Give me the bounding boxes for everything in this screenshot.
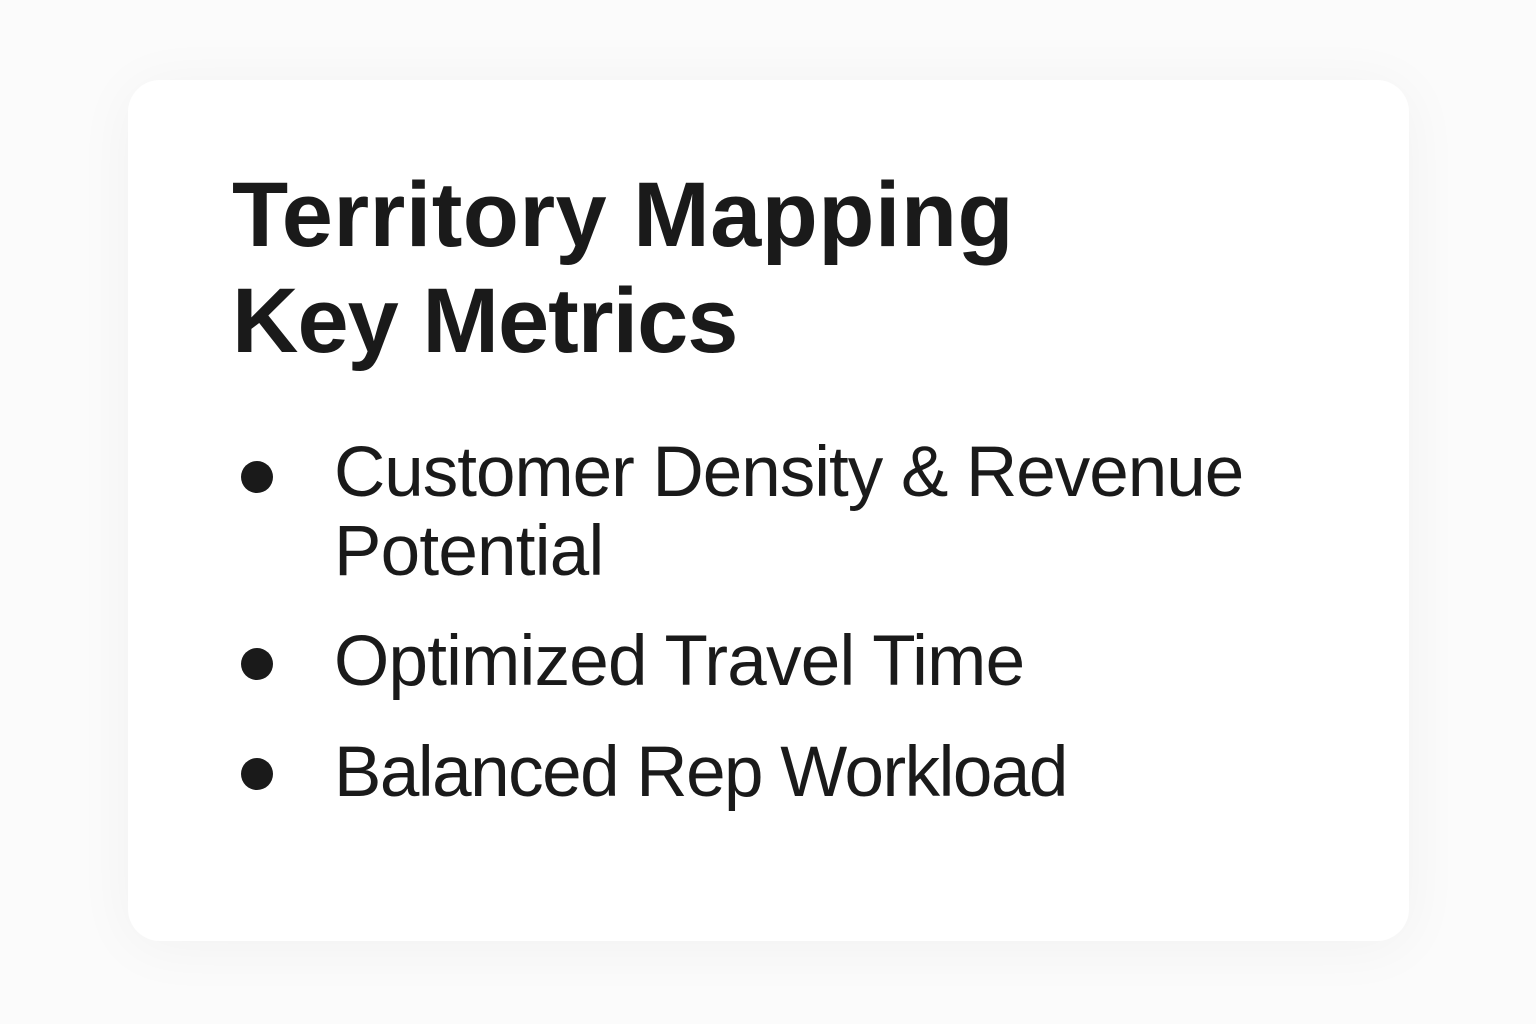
title bbox=[232, 164, 1014, 372]
bullet icon 3 bbox=[241, 758, 273, 790]
panel: card bbox=[128, 80, 1409, 941]
bullet icon 2 bbox=[241, 648, 273, 680]
text: rep workload: Balanced Rep Workload bbox=[334, 733, 1067, 812]
text line 2: Potential bbox=[334, 512, 604, 591]
title line 1: Territory Mapping bbox=[232, 164, 1014, 266]
text: customer density bbox=[334, 433, 1243, 591]
text: travel time: Optimized Travel Time bbox=[334, 622, 1024, 701]
title line 2: Key Metrics bbox=[232, 270, 737, 372]
bullet icon 1 bbox=[241, 461, 273, 493]
text line 1: Customer Density & Revenue bbox=[334, 433, 1243, 512]
